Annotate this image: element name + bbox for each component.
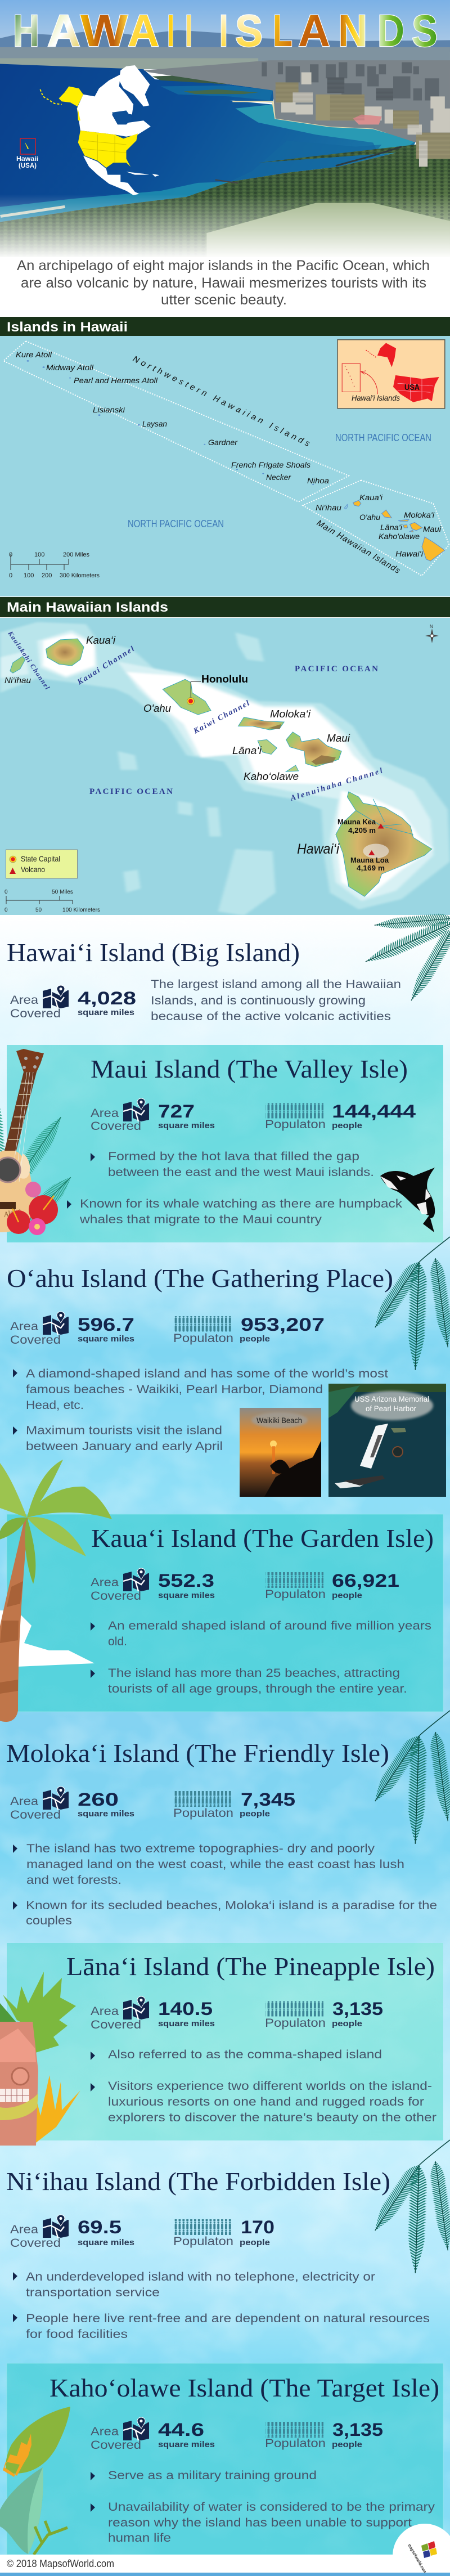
stat: population: [173, 2217, 274, 2248]
section heading: Islands in Hawaii: [0, 317, 450, 336]
stat: area: Area: [91, 1576, 119, 1589]
bullet: human life: [108, 2532, 171, 2544]
stat: population: 170: [241, 2217, 274, 2237]
map: Main Hawaiian Islands: Honolulu: [201, 674, 248, 685]
bullet: old.: [108, 1635, 127, 1648]
map: Main Hawaiian Islands: Kaiwi Channel: [192, 699, 251, 736]
title: D: [377, 6, 404, 56]
illustration: tropical leaves: [0, 2407, 70, 2555]
map: Main Hawaiian Islands: Moloka‘i: [270, 708, 311, 720]
bullet: transportation service: [26, 2286, 160, 2299]
photo: Waikiki Beach: [240, 1408, 321, 1497]
map: Islands in Hawaii: Laysan: [142, 419, 167, 428]
bullet: Maximum tourists visit the island: [26, 1424, 222, 1437]
photo: USS Arizona Memorial: [328, 1384, 446, 1497]
stat: population: 144,444: [332, 1101, 416, 1121]
title: A: [128, 6, 159, 56]
map: Islands in Hawaii: Pearl and Hermes Atoll: [74, 376, 158, 385]
inset map: USA and Hawaii: [338, 340, 445, 409]
bullet: [67, 1197, 403, 1226]
stat: population: 7,345: [241, 1789, 295, 1810]
compass: N: [430, 624, 433, 629]
scale bar: miles and kilometers: 200 Miles: [63, 551, 89, 558]
map: Main Hawaiian Islands: Kaua‘i: [86, 635, 116, 646]
map: Main Hawaiian Islands: Kaho‘olawe: [244, 771, 299, 782]
intro text: [17, 258, 430, 308]
section heading: Main Hawaiian Islands: Main Hawaiian Islands: [7, 600, 168, 615]
scale bar: miles and kilometers: 100: [24, 572, 34, 579]
stat: area: 596.7: [78, 1314, 134, 1335]
stat: population: people: [332, 2440, 362, 2449]
title: A: [47, 6, 80, 56]
map: Islands in Hawaii: Kure Atoll: [16, 350, 52, 359]
title: S: [412, 6, 438, 56]
map: Main Hawaiian Islands: Hawai‘i: [297, 841, 340, 857]
bullet: for food facilities: [26, 2328, 128, 2341]
stat: population: 3,135: [332, 2420, 383, 2440]
stat: population: 953,207: [241, 1314, 325, 1335]
stat: area: 44.6: [158, 2420, 204, 2440]
stat: population: [265, 2420, 383, 2450]
logo: MapsofWorld: [393, 2524, 450, 2576]
bullet: Visitors experience two different worlds on the island-: [108, 2080, 432, 2093]
map: Main Hawaiian Islands: Kaulakahi Channel: [6, 629, 52, 691]
heading: Moloka‘i Island (The Friendly Isle): [6, 1739, 389, 1767]
scale bar: main islands: 50 Miles: [52, 889, 73, 895]
photo: USS Arizona Memorial: of Pearl Harbor: [366, 1404, 416, 1413]
stat: population: [265, 1999, 383, 2030]
bullet: [91, 1150, 374, 1179]
inset: Hawaii location box: (USA): [19, 161, 37, 169]
stat: area: [10, 1787, 134, 1821]
stat: population: [173, 1314, 325, 1345]
section: O'ahu Island: [7, 1264, 393, 1453]
map: Islands in Hawaii: Necker: [266, 473, 291, 482]
stat: area: square miles: [158, 2019, 215, 2029]
scale bar: main islands: 100 Kilometers: [62, 907, 100, 913]
illustration: ukulele with leaves and flowers: [0, 1049, 78, 1235]
map: Islands in Hawaii: Moloka'i: [404, 510, 435, 519]
bullet: The island has more than 25 beaches, attracting: [108, 1667, 400, 1680]
map: Islands in Hawaii: Ni'ihau: [316, 503, 341, 512]
section: Hawai'i Island: [7, 938, 401, 1023]
stat: area: Covered: [10, 1007, 61, 1020]
description: [151, 978, 401, 1023]
scale bar: miles and kilometers: 200: [42, 572, 52, 579]
bullet: Also referred to as the comma-shaped island: [108, 2048, 382, 2061]
stat: area: Covered: [91, 2018, 141, 2031]
bullet: between January and early April: [26, 1440, 223, 1453]
title: [13, 6, 438, 56]
map: Islands in Hawaii: Gardner: [208, 438, 238, 447]
description: because of the active volcanic activities: [151, 1010, 391, 1023]
bullet: Head, etc.: [26, 1399, 84, 1412]
photo: USS Arizona Memorial: USS Arizona Memorial: [354, 1394, 429, 1403]
stat: area: Covered: [91, 1590, 141, 1603]
stat: population: 3,135: [332, 1999, 383, 2019]
stat: population: people: [240, 1809, 270, 1819]
section: Moloka'i Island: [6, 1739, 437, 1927]
scale bar: miles and kilometers: 300 Kilometers: [60, 572, 100, 579]
map: Islands in Hawaii: Kaua'i: [359, 493, 383, 502]
stat: area: square miles: [158, 1591, 215, 1600]
stat: area: [91, 1996, 215, 2031]
scale bar: miles and kilometers: [9, 551, 100, 579]
stat: area: Covered: [91, 2439, 141, 2452]
map: Main Hawaiian Islands: Alenuihaha Channel: [289, 767, 384, 803]
intro text: are also volcanic by nature, Hawaii mesmerizes tourists with its: [21, 275, 426, 291]
illustration: palm tree and cloud: [0, 1460, 112, 1722]
stat: area: [10, 2215, 134, 2250]
bullet: An underdeveloped island with no telephone, electricity or: [26, 2270, 375, 2283]
stat: area: Area: [10, 1795, 38, 1808]
stat: area: Area: [91, 2425, 119, 2438]
legend: [6, 850, 78, 878]
panel: Maui Island: [7, 1045, 443, 1242]
description: The largest island among all the Hawaiian: [151, 978, 401, 991]
bullet: whales that migrate to the Maui country: [79, 1213, 322, 1226]
scale bar: main islands: 0: [4, 907, 8, 913]
footer: © 2018 MapsofWorld.com: [7, 2558, 114, 2569]
stat: area: [10, 1312, 134, 1347]
stat: area: Area: [10, 994, 38, 1007]
stat: population: people: [240, 2238, 270, 2247]
stat: population: Populaton: [265, 2017, 326, 2030]
stat: area: Area: [91, 2005, 119, 2018]
stat: population: Populaton: [265, 1118, 326, 1131]
bullet: [13, 2312, 430, 2341]
stat: population: Populaton: [265, 2437, 326, 2450]
bullet: People here live rent-free and are dependent on natural resources: [26, 2312, 430, 2325]
stat: area: [91, 1568, 215, 1603]
stat: area: [91, 1098, 215, 1133]
title: I: [185, 6, 192, 56]
map: Islands in Hawaii: Midway Atoll: [46, 363, 94, 372]
map: Main Hawaiian Islands: Mauna Kea: [338, 818, 376, 826]
heading: Kaho‘olawe Island (The Target Isle): [50, 2373, 439, 2402]
map: Islands in Hawaii: French Frigate Shoals: [231, 460, 310, 469]
stat: area: square miles: [78, 1008, 134, 1017]
bullet: [13, 1367, 388, 1412]
illustration: ukulele with leaves and flowers: Aloha: [2, 1206, 22, 1219]
stat: area: square miles: [158, 2440, 215, 2449]
scale bar: main islands: 0: [4, 889, 8, 895]
stat: area: Covered: [91, 1120, 141, 1133]
scale bar: main islands: 50: [35, 907, 42, 913]
map: Main Hawaiian Islands: 4,205 m: [348, 826, 376, 834]
bullet: [13, 1899, 437, 1927]
scale bar: main islands: [4, 889, 100, 913]
locator map: North America with USA highlighted: [40, 65, 159, 195]
stat: area: 4,028: [78, 988, 136, 1008]
map: Islands in Hawaii: Northwestern Hawaiian Islands: [131, 354, 312, 448]
stat: area: 552.3: [158, 1570, 214, 1591]
title: H: [13, 6, 39, 56]
stat: population: people: [332, 1591, 362, 1600]
decoration: palm frond: [366, 2140, 450, 2274]
heading: Maui Island (The Valley Isle): [91, 1054, 408, 1083]
stat: area: Covered: [10, 1808, 61, 1821]
stat: area: 69.5: [78, 2217, 122, 2237]
map: Islands in Hawaii: Nihoa: [307, 476, 329, 485]
decoration: palm frond: [366, 1237, 450, 1371]
stat: population: [265, 1101, 416, 1131]
map: Main Hawaiian Islands: PACIFIC OCEAN: [295, 665, 378, 674]
title: I: [219, 6, 228, 56]
panel: Kaho'olawe Island: [7, 2363, 443, 2555]
map: Islands in Hawaii: NORTH PACIFIC OCEAN: [335, 432, 431, 443]
inset map: USA and Hawaii: Hawai'i Islands: [352, 393, 400, 402]
decoration: palm frond: [366, 1711, 450, 1845]
title: A: [298, 6, 330, 56]
stat: area: [91, 2417, 215, 2452]
bullet: and wet forests.: [26, 1874, 122, 1887]
bullet: [13, 2270, 375, 2299]
inset map: USA and Hawaii: USA: [404, 383, 420, 392]
title: L: [273, 6, 292, 56]
footer: [0, 2555, 450, 2576]
stat: area: [10, 985, 136, 1020]
bullet: The island has two extreme topographies- dry and poorly: [26, 1842, 375, 1855]
bullet: between the east and the west Maui islands.: [108, 1166, 374, 1179]
stat: area: Area: [10, 1320, 38, 1333]
legend: State Capital: [21, 854, 60, 863]
intro text: utter scenic beauty.: [161, 292, 287, 308]
watercolor background: [0, 915, 450, 2555]
title: I: [167, 6, 174, 56]
map: Islands in Hawaii: [0, 336, 450, 596]
stat: area: Covered: [10, 2237, 61, 2250]
bullet: reason why the island has been unable to support: [108, 2516, 412, 2529]
bullet: [13, 1842, 404, 1887]
map: Main Hawaiian Islands: Lāna‘i: [232, 745, 262, 756]
stat: population: 66,921: [332, 1570, 399, 1591]
compass: [425, 624, 439, 643]
stat: area: 140.5: [158, 1999, 213, 2019]
bullet: [91, 2501, 435, 2544]
description: Islands, and is continuously growing: [151, 994, 366, 1007]
title: S: [235, 6, 263, 56]
bullet: [91, 2080, 436, 2124]
title: W: [80, 6, 128, 56]
map: Islands in Hawaii: Kaho'olawe: [379, 532, 420, 541]
heading: Kaua‘i Island (The Garden Isle): [91, 1524, 434, 1552]
decoration: palm frond top right: [362, 910, 450, 1005]
stat: area: square miles: [158, 1121, 215, 1130]
map: Islands in Hawaii: Main Hawaiian Islands: [315, 518, 402, 576]
stat: population: Populaton: [173, 1807, 233, 1820]
stat: area: Area: [10, 2223, 38, 2236]
map: Islands in Hawaii: Lāna'i: [380, 523, 403, 532]
stat: area: 260: [78, 1789, 119, 1810]
bullet: tourists of all age groups, through the entire year.: [108, 1682, 407, 1695]
bullet: Unavailability of water is considered to be the primary: [108, 2501, 435, 2514]
map: Islands in Hawaii: Hawai'i: [395, 549, 424, 558]
map: Islands in Hawaii: NORTH PACIFIC OCEAN: [128, 518, 224, 529]
section heading: Main Hawaiian Islands: [0, 596, 450, 618]
photo: Waikiki Beach: Waikiki Beach: [256, 1416, 302, 1425]
bullet: [91, 1619, 431, 1648]
map: Main Hawaiian Islands: Ni‘ihau: [4, 676, 32, 685]
stat: population: people: [332, 2019, 362, 2029]
stat: population: [173, 1789, 295, 1820]
map: Main Hawaiian Islands: O'ahu: [143, 703, 171, 714]
stat: population: people: [240, 1334, 270, 1344]
bullet: Serve as a military training ground: [108, 2469, 317, 2482]
inset: Hawaii location box: [16, 138, 38, 169]
bullet: [91, 1667, 407, 1695]
bullet: famous beaches - Waikiki, Pearl Harbor, Diamond: [26, 1383, 323, 1396]
stat: area: square miles: [78, 1809, 134, 1819]
bullet: couples: [26, 1914, 72, 1927]
bullet: Known for its whale watching as there are humpback: [80, 1197, 403, 1210]
intro text: An archipelago of eight major islands in the Pacific Ocean, which: [17, 258, 430, 273]
inset: Hawaii location box: Hawaii: [16, 155, 38, 163]
scale bar: miles and kilometers: 0: [9, 551, 12, 558]
map: Islands in Hawaii: Maui: [423, 524, 442, 533]
heading: Hawai‘i Island (Big Island): [7, 938, 300, 967]
bullet: An emerald shaped island of around five million years: [108, 1619, 431, 1632]
bullet: [13, 1424, 223, 1453]
map: Main Hawaiian Islands: 4,169 m: [357, 864, 385, 872]
stat: area: Area: [91, 1107, 119, 1120]
bullet: A diamond-shaped island and has some of the world’s most: [26, 1367, 388, 1380]
stat: area: Covered: [10, 1334, 61, 1347]
stat: population: people: [332, 1121, 362, 1130]
stat: area: 727: [158, 1101, 195, 1121]
map: Islands in Hawaii: Lisianski: [93, 405, 125, 414]
stat: population: Populaton: [173, 2235, 233, 2248]
map: Main Hawaiian Islands: [0, 618, 450, 915]
map: Islands in Hawaii: O'ahu: [359, 513, 380, 522]
illustration: orca: [380, 1168, 435, 1232]
bullet: managed land on the west coast, while the east coast has lush: [26, 1858, 404, 1871]
map: Main Hawaiian Islands: Kauai Channel: [75, 645, 136, 687]
bullet: explorers to discover the nature’s beauty on the other: [108, 2111, 436, 2124]
map: Main Hawaiian Islands: Mauna Loa: [350, 856, 389, 864]
towers: [276, 82, 450, 159]
heading: Lāna‘i Island (The Pineapple Isle): [66, 1952, 435, 1981]
stat: area: square miles: [78, 2238, 134, 2247]
section: Ni'ihau Island: [6, 2167, 430, 2341]
stat: population: Populaton: [173, 1332, 233, 1345]
stat: area: square miles: [78, 1334, 134, 1344]
panel: Lāna'i Island: [7, 1943, 443, 2140]
legend: Volcano: [21, 865, 45, 874]
section heading: Islands in Hawaii: Islands in Hawaii: [7, 320, 128, 335]
illustration: tiki statue with leaves: [0, 1972, 80, 2146]
heading: O‘ahu Island (The Gathering Place): [7, 1264, 393, 1293]
bullet: luxurious resorts on one hand and rugged roads for: [108, 2095, 424, 2108]
scale bar: miles and kilometers: 100: [34, 551, 44, 558]
heading: Ni‘ihau Island (The Forbidden Isle): [6, 2167, 390, 2196]
stat: population: Populaton: [265, 1588, 326, 1601]
hero photo: Waikiki coastline: [0, 0, 450, 264]
bullet: Known for its secluded beaches, Moloka‘i island is a paradise for the: [26, 1899, 437, 1912]
map: Main Hawaiian Islands: PACIFIC OCEAN: [89, 787, 173, 796]
scale bar: miles and kilometers: 0: [9, 572, 12, 579]
map: Main Hawaiian Islands: Maui: [327, 733, 350, 744]
panel: Kaua'i Island: [7, 1514, 443, 1712]
stat: population: [265, 1570, 399, 1601]
bullet: Formed by the hot lava that filled the gap: [108, 1150, 359, 1163]
title: N: [338, 6, 367, 56]
